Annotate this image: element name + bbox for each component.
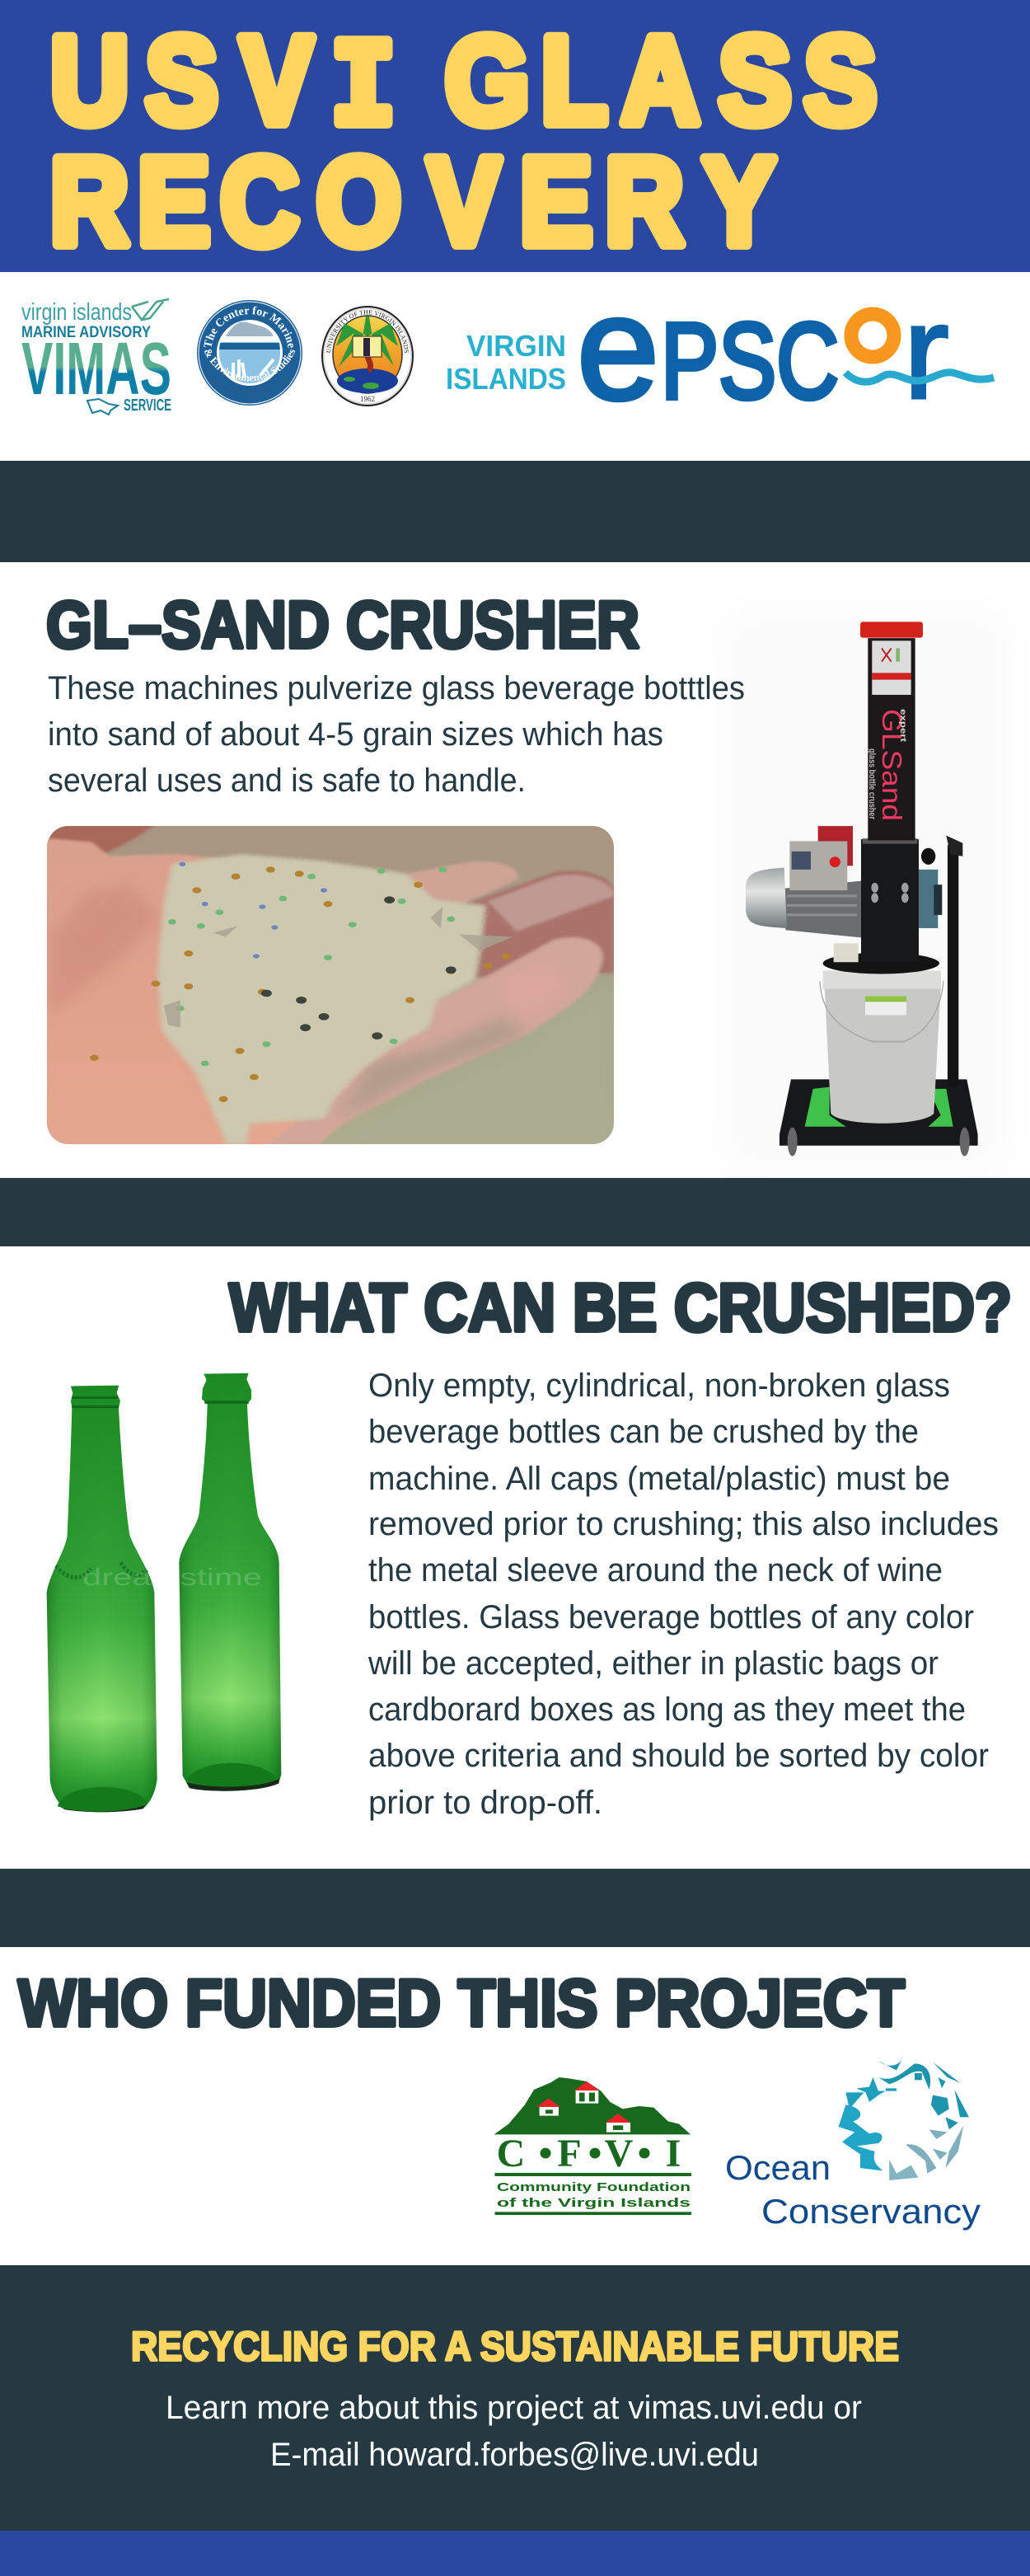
icon: ring of marine life xyxy=(878,2055,930,2090)
footer contact text xyxy=(166,2390,862,2473)
description text: These machines pulverize glass beverage botttles xyxy=(48,670,745,706)
logo: Ocean Conservancy: Ocean xyxy=(725,2148,831,2187)
photo: GL-Sand machine xyxy=(725,614,1005,1166)
logo: Ocean Conservancy: Conservancy xyxy=(761,2192,981,2231)
panel: who funded xyxy=(18,1967,981,2231)
title line 2: RECOVERY xyxy=(50,132,775,270)
body text: cardborard boxes as long as they meet the xyxy=(368,1692,966,1728)
divider band 2 xyxy=(0,1178,1030,1246)
logo wordmark: Virgin Islands: VIRGIN xyxy=(466,329,566,363)
body text: Only empty, cylindrical, non-broken glass xyxy=(368,1368,950,1404)
body text: will be accepted, either in plastic bags or xyxy=(368,1645,939,1682)
logo: VIMAS: SERVICE xyxy=(124,396,171,415)
body text: above criteria and should be sorted by color xyxy=(368,1738,989,1774)
panel: GL-Sand crusher xyxy=(45,589,1005,1166)
watermark: dreamstime xyxy=(82,1565,262,1591)
panel: what can be crushed xyxy=(47,1269,1012,1821)
machine: collection bucket xyxy=(823,971,941,1124)
footer contact text: Learn more about this project at vimas.uvi.edu or xyxy=(166,2390,862,2426)
footer tagline: RECYCLING FOR A SUSTAINABLE FUTURE xyxy=(131,2323,899,2369)
photo: GL-Sand machine: expert xyxy=(898,709,907,743)
bottom blue band xyxy=(0,2531,1030,2576)
divider band 1 xyxy=(0,461,1030,562)
logo: Virgin Islands EPSCoR: PSC xyxy=(661,300,839,421)
divider band 3 xyxy=(0,1869,1030,1947)
icon: turtle xyxy=(87,399,118,415)
bottle: right xyxy=(179,1373,281,1791)
footer contact text: E-mail howard.forbes@live.uvi.edu xyxy=(270,2437,759,2473)
machine label: GLSand: GLSand xyxy=(877,709,907,821)
photo: upper fingers xyxy=(407,861,519,903)
logo: CFVI: C•F•V•I xyxy=(497,2132,681,2175)
description text: into sand of about 4-5 grain sizes which has xyxy=(48,716,663,753)
machine: motor xyxy=(818,826,853,866)
logo: Virgin Islands EPSCoR xyxy=(446,265,994,431)
logo: University of the Virgin Islands seal xyxy=(321,306,414,406)
body text: removed prior to crushing; this also includes xyxy=(368,1506,999,1542)
header banner xyxy=(0,0,1030,272)
body text xyxy=(368,1368,999,1821)
photo: GL-Sand machine: glass bottle crusher xyxy=(867,748,877,820)
logo wordmark: EPSCoR: e xyxy=(577,265,659,431)
logo: University of the Virgin Islands seal: 1962 xyxy=(360,395,375,403)
logo: University of the Virgin Islands seal: UNIVERSITY OF THE VIRGIN ISLANDS xyxy=(326,310,409,353)
body text: beverage bottles can be crushed by the xyxy=(368,1414,919,1450)
heading: WHO FUNDED THIS PROJECT xyxy=(18,1967,905,2041)
icon: bird xyxy=(132,299,169,320)
machine: hand truck base xyxy=(780,1079,978,1146)
photo: lower finger xyxy=(266,937,603,1146)
footer panel xyxy=(0,2265,1030,2531)
machine: bucket lid xyxy=(823,953,939,974)
bottle: left xyxy=(47,1386,157,1812)
description text xyxy=(48,670,745,799)
logo: Ocean Conservancy xyxy=(725,2055,981,2231)
logo: Virgin Islands EPSCoR: r xyxy=(903,276,949,427)
logo: VIMAS: VIMAS xyxy=(21,328,171,411)
photo: sand pile xyxy=(158,855,486,1144)
machine: column xyxy=(868,638,915,841)
photo: crushed glass sand in hand xyxy=(45,824,615,1146)
logo: Center for Marine seal xyxy=(197,300,302,406)
body text: prior to drop-off. xyxy=(368,1785,602,1821)
logo: Center for Marine seal: & Environmental Studies xyxy=(204,350,295,382)
logo: CFVI xyxy=(494,2077,691,2215)
logo: Center for Marine seal: The Center for Marine xyxy=(204,307,293,348)
heading: GL–SAND CRUSHER xyxy=(46,589,639,663)
body text: machine. All caps (metal/plastic) must be xyxy=(368,1461,950,1497)
logo: VIMAS: MARINE ADVISORY xyxy=(21,324,151,341)
title line 1: USVI GLASS xyxy=(50,11,877,161)
photo: two green bottles xyxy=(47,1373,281,1812)
machine: crusher housing xyxy=(861,839,919,962)
logo: CFVI: of the Virgin Islands xyxy=(497,2196,691,2210)
body text: the metal sleeve around the neck of wine xyxy=(368,1552,943,1588)
logo: VIMAS: virgin islands xyxy=(21,299,132,326)
machine: upright handle xyxy=(948,845,958,1087)
logo: Center for Marine seal: The University of The Virgin Islands xyxy=(212,378,288,396)
logo: VIMAS xyxy=(21,299,171,415)
logo: Virgin Islands EPSCoR: ISLANDS xyxy=(446,362,566,396)
photo: finger at top left xyxy=(45,824,156,853)
body text: bottles. Glass beverage bottles of any color xyxy=(368,1599,974,1635)
logo: CFVI: Community Foundation xyxy=(497,2180,691,2194)
photo: palm xyxy=(47,838,354,1144)
description text: several uses and is safe to handle. xyxy=(48,762,526,799)
